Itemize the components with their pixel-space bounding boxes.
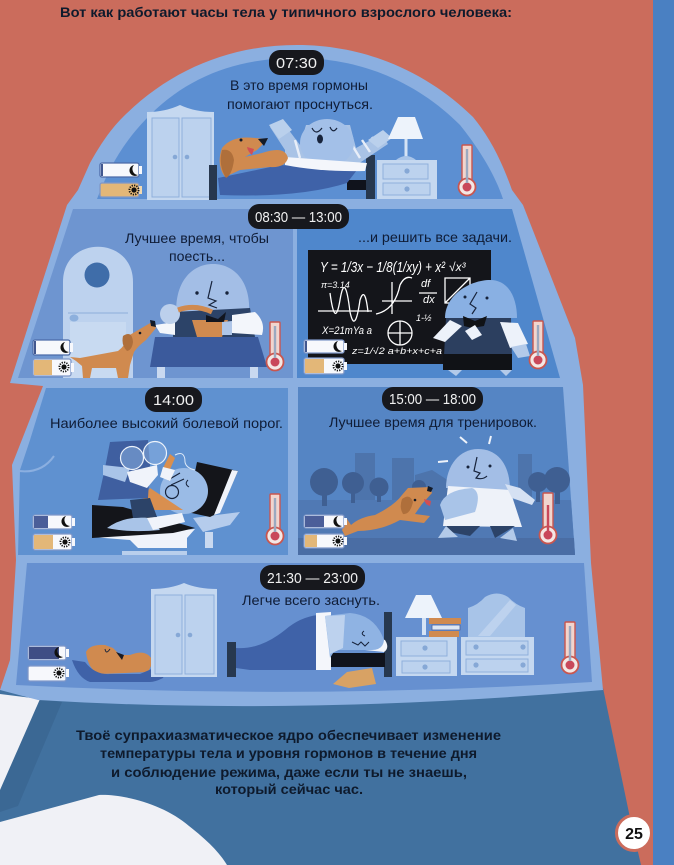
icon: battery hormones [304, 340, 347, 374]
icon: thermometer [458, 145, 476, 196]
caption [125, 230, 269, 264]
icon: dresser with mirror [461, 594, 534, 675]
bottom explanatory text: температуры тела и уровня гормонов в течение дня [100, 745, 477, 761]
page number [616, 816, 652, 850]
icon: thermometer [266, 494, 284, 544]
time badge: 08:30 — 13:00 [255, 209, 342, 226]
icon: dentist [98, 440, 195, 518]
time badge: 21:30 — 23:00 [267, 570, 358, 587]
page number: 25 [625, 826, 643, 843]
icon: battery hormones [33, 515, 75, 550]
road [298, 538, 575, 555]
white shirt collar left [0, 694, 40, 790]
blackboard with formulas: √x³ [449, 260, 467, 274]
time badge [248, 204, 349, 229]
panel: 14:00 dentist [13, 387, 288, 555]
body lower dark area [0, 688, 641, 865]
blackboard with formulas: Y = 1/3x − 1/8(1/xy) + x² [320, 259, 446, 276]
icon: battery hormones [100, 163, 142, 197]
caption [227, 77, 373, 112]
icon: lamp [388, 117, 423, 160]
icon: table [150, 337, 267, 378]
blackboard with formulas: 1-½ [416, 313, 432, 323]
icon: battery hormones [33, 340, 74, 376]
ground [298, 500, 575, 555]
icon: battery hormones [304, 515, 347, 548]
time badge [269, 50, 324, 75]
bottom explanatory text: Твоё супрахиазматическое ядро обеспечивает изменение [76, 727, 501, 743]
time badge [145, 387, 202, 412]
caption: поесть... [169, 248, 225, 264]
darker fold beside collar [0, 699, 62, 812]
time badge: 15:00 — 18:00 [389, 391, 476, 408]
caption: Лучшее время для тренировок. [329, 414, 537, 430]
caption: ...и решить все задачи. [358, 229, 512, 245]
blackboard with formulas: π=3.14 [321, 280, 350, 290]
right blue strip [653, 0, 674, 865]
time badge: 07:30 [276, 55, 317, 72]
white shoulder blob [0, 795, 227, 865]
blackboard with formulas: X=21mYa a [321, 325, 372, 337]
icon: wardrobe [151, 583, 217, 677]
icon: nightstand [396, 637, 457, 676]
blackboard with formulas: df [421, 278, 431, 290]
blackboard with formulas: z=1/√2 a+b+x+c+a [351, 346, 442, 356]
time badge [260, 565, 365, 590]
icon: person running [438, 449, 535, 541]
icon: teacher thinking [433, 280, 530, 376]
icon: thermometer [530, 321, 546, 368]
caption: В это время гормоны [230, 77, 368, 93]
icon: thermometer [266, 322, 284, 370]
bottom explanatory text: и соблюдение режима, даже если ты не знаешь, [111, 764, 467, 780]
panel: 15:00 training [298, 387, 575, 555]
icon: dog begging [70, 320, 156, 378]
motion sparks [438, 436, 491, 462]
icon: dog running [342, 486, 433, 536]
panel: 08:30 eating [18, 209, 293, 378]
time badge [382, 387, 483, 411]
bottom explanatory text: который сейчас час. [215, 781, 363, 797]
icon: bed with person and dog [209, 119, 392, 200]
icon: thermometer [562, 622, 578, 674]
icon: patient [143, 468, 208, 530]
icon: person eating [155, 264, 263, 337]
icon: thermometer [540, 493, 556, 544]
panel: 08:30 solving problems [297, 209, 560, 378]
icon: wardrobe [147, 105, 214, 200]
panel: 07:30 waking up [97, 50, 503, 200]
caption: Наиболее высокий болевой порог. [50, 415, 283, 431]
city skyline [355, 453, 532, 500]
trees [310, 467, 570, 506]
icon: door [63, 247, 133, 378]
blackboard with formulas: dx [423, 294, 435, 306]
title: Вот как работают часы тела у типичного взрослого человека: [60, 4, 512, 20]
icon: dentist chair [92, 462, 240, 555]
icon: book on floor [333, 668, 376, 688]
blackboard with formulas [308, 250, 491, 364]
icon: dog in basket [72, 645, 170, 682]
icon: lamp [405, 595, 442, 635]
icon: battery hormones [28, 646, 69, 681]
panel: 21:30 falling asleep [16, 563, 592, 692]
bottom explanatory text [76, 727, 501, 797]
time badge: 14:00 [153, 392, 194, 409]
caption: помогают проснуться. [227, 96, 373, 112]
caption: Легче всего заснуть. [242, 592, 380, 608]
caption: Лучшее время, чтобы [125, 230, 269, 246]
icon: nightstand [377, 160, 437, 199]
icon: sleeping person in bed [227, 612, 392, 677]
head silhouette building [0, 45, 603, 706]
icon: stack of books [429, 618, 461, 637]
